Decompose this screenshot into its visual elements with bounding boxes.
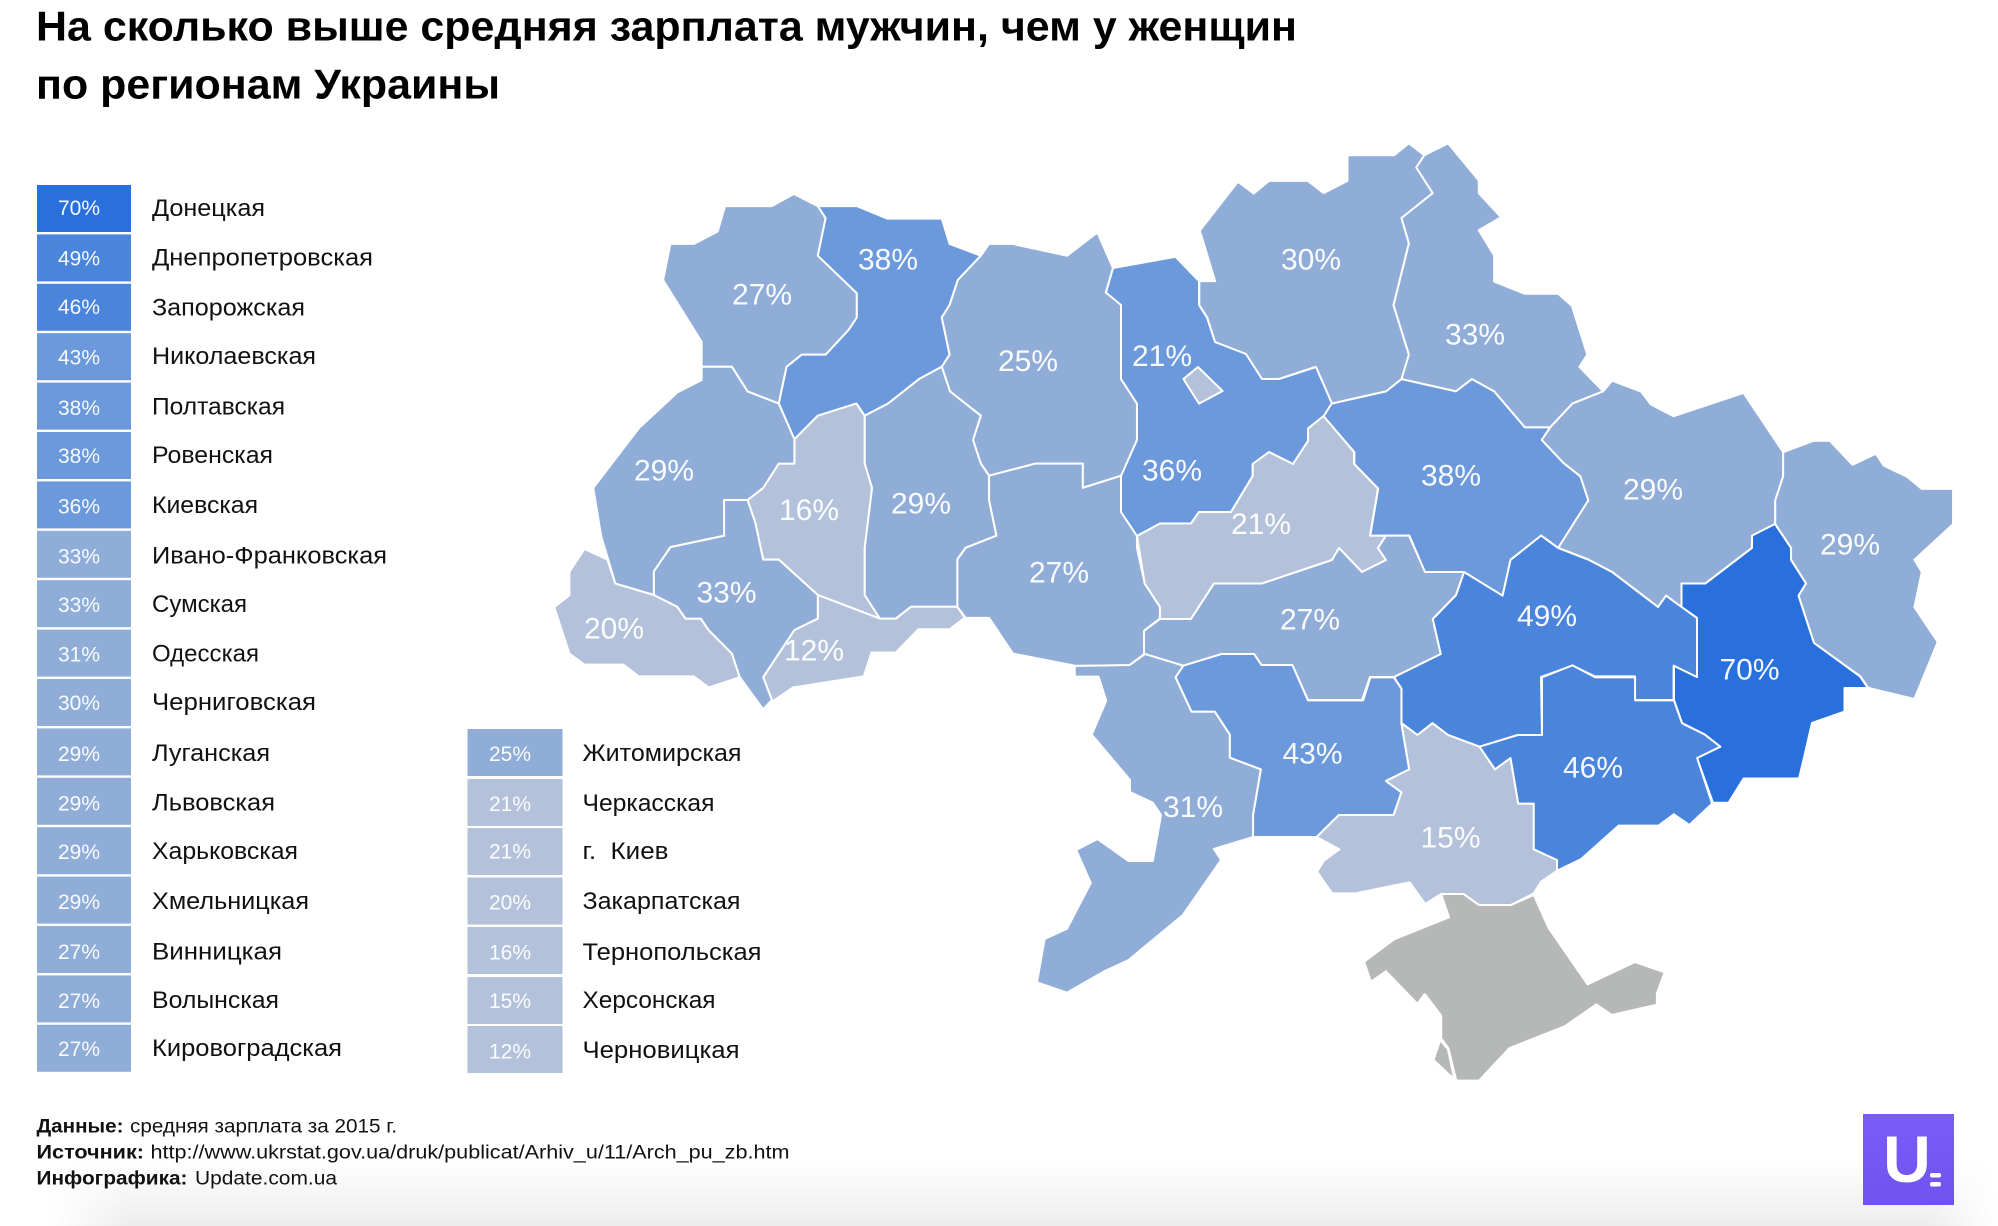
- region: Zakarpattia: [554, 549, 740, 687]
- legend: ranked regions, first column: Днепропетровская: [152, 244, 373, 272]
- region: Ivano-Frankivsk: [654, 500, 818, 709]
- map value labels: 49%: [1517, 600, 1577, 633]
- legend: ranked regions, first column: Сумская: [152, 591, 247, 618]
- legend: ranked regions, first column: [37, 185, 387, 1072]
- legend: ranked regions, first column: Запорожская: [152, 294, 305, 322]
- footer: data source credits: Источник:: [36, 1142, 144, 1164]
- region: Kharkiv: [1542, 381, 1783, 607]
- legend: ranked regions, first column: 27%: [58, 1038, 100, 1061]
- legend: ranked regions, second column: 21%: [489, 793, 531, 816]
- map value labels: 29%: [1820, 528, 1880, 562]
- legend: ranked regions, second column: 20%: [489, 892, 531, 914]
- legend: ranked regions, second column: Херсонская: [582, 987, 716, 1014]
- map value labels: 27%: [732, 278, 792, 312]
- legend: ranked regions, first column: Кировоградская: [152, 1035, 342, 1062]
- legend: ranked regions, first column: Хмельницкая: [152, 888, 309, 915]
- region: Cherkasy: [1137, 416, 1386, 619]
- legend: ranked regions, second column: Черновицкая: [582, 1037, 740, 1064]
- legend: ranked regions, second column: [468, 729, 762, 1073]
- legend: ranked regions, second column: Закарпатская: [582, 888, 740, 915]
- legend: ranked regions, first column: 27%: [58, 990, 100, 1013]
- map value labels: [584, 244, 1880, 854]
- legend: ranked regions, first column: Винницкая: [152, 938, 282, 966]
- legend: ranked regions, first column: 29%: [58, 743, 100, 766]
- region: Donetsk: [1674, 524, 1868, 803]
- region: Poltava: [1324, 379, 1588, 596]
- region: Ternopil: [748, 404, 880, 619]
- map value labels: 29%: [1623, 474, 1683, 506]
- map value labels: 29%: [634, 454, 694, 488]
- map value labels: 21%: [1132, 340, 1192, 373]
- legend: ranked regions, second column: г. Киев: [582, 838, 668, 865]
- map value labels: 36%: [1142, 454, 1202, 488]
- legend: ranked regions, first column: 70%: [58, 197, 100, 220]
- map value labels: 38%: [1421, 460, 1481, 492]
- region: Chernihiv: [1199, 143, 1433, 404]
- footer: data source credits: [36, 1116, 790, 1190]
- region: Zaporizhzhia: [1479, 665, 1720, 871]
- legend: ranked regions, first column: Харьковская: [152, 838, 298, 865]
- legend: ranked regions, second column: 25%: [489, 743, 531, 766]
- region: Sumy: [1394, 143, 1603, 427]
- region: Kirovohrad: [1144, 536, 1464, 700]
- legend: ranked regions, first column: Полтавская: [152, 394, 285, 420]
- region: Khmelnytskyi: [865, 367, 996, 619]
- region: Crimea (no data): [1364, 894, 1665, 1081]
- map value labels: 29%: [891, 488, 951, 520]
- map value labels: 70%: [1719, 654, 1780, 686]
- legend: ranked regions, second column: Черкасская: [582, 790, 714, 817]
- footer: data source credits: http://www.ukrstat.gov.ua/druk/publicat/Arhiv_u/11/Arch_pu_zb.htm: [150, 1142, 790, 1164]
- footer: data source credits: Update.com.ua: [195, 1168, 337, 1190]
- region: Vinnytsia: [957, 464, 1160, 666]
- legend: ranked regions, first column: 29%: [58, 891, 100, 914]
- legend: ranked regions, second column: 21%: [489, 840, 531, 864]
- map value labels: 30%: [1281, 244, 1341, 276]
- legend: ranked regions, first column: 43%: [58, 346, 100, 370]
- region: Odesa: [1037, 654, 1261, 993]
- legend: ranked regions, second column: Житомирская: [582, 740, 742, 767]
- map value labels: 27%: [1029, 556, 1089, 590]
- region: Chernivtsi: [763, 595, 965, 705]
- map value labels: 33%: [696, 576, 757, 610]
- region: Volyn: [663, 194, 857, 404]
- footer: data source credits: средняя зарплата за 2015 г.: [130, 1116, 397, 1138]
- region: Lviv: [593, 367, 794, 595]
- legend: ranked regions, first column: Киевская: [152, 492, 258, 519]
- title: [36, 2, 1297, 108]
- legend: ranked regions, first column: Луганская: [152, 740, 270, 767]
- legend: ranked regions, first column: 33%: [58, 594, 100, 617]
- legend: ranked regions, first column: 31%: [58, 644, 100, 666]
- legend: ranked regions, first column: Донецкая: [152, 195, 265, 222]
- legend: ranked regions, second column: Тернопольская: [582, 939, 762, 966]
- map value labels: 43%: [1282, 738, 1343, 770]
- map value labels: 16%: [779, 494, 839, 527]
- legend: ranked regions, first column: Волынская: [152, 987, 279, 1014]
- legend: ranked regions, first column: Одесская: [152, 640, 259, 668]
- legend: ranked regions, first column: 30%: [58, 692, 100, 715]
- map value labels: 27%: [1280, 604, 1340, 636]
- region: Luhansk: [1775, 441, 1953, 699]
- map value labels: 21%: [1231, 508, 1291, 541]
- map value labels: 12%: [784, 634, 844, 668]
- legend: ranked regions, second column: 16%: [489, 942, 531, 964]
- logo: Update: U: [1883, 1122, 1931, 1196]
- title: по регионам Украины: [36, 60, 500, 108]
- legend: ranked regions, first column: 27%: [58, 941, 100, 964]
- map value labels: 25%: [998, 345, 1058, 378]
- legend: ranked regions, second column: 15%: [489, 990, 531, 1013]
- choropleth map of Ukraine regions: [554, 143, 1953, 1081]
- logo: Update: [1863, 1114, 1954, 1205]
- region: Mykolaiv: [1176, 654, 1409, 837]
- title: На сколько выше средняя зарплата мужчин, чем у женщин: [36, 2, 1297, 50]
- region: Kherson: [1317, 723, 1557, 905]
- map value labels: 38%: [858, 244, 918, 276]
- legend: ranked regions, first column: Николаевская: [152, 343, 316, 370]
- legend: ranked regions, first column: 46%: [58, 296, 100, 319]
- legend: ranked regions, first column: 33%: [58, 546, 100, 568]
- legend: ranked regions, first column: 38%: [58, 397, 100, 420]
- map value labels: 46%: [1563, 752, 1623, 784]
- legend: ranked regions, first column: 49%: [58, 248, 100, 270]
- region: Rivne: [779, 206, 981, 439]
- legend: ranked regions, first column: 36%: [58, 496, 100, 518]
- map value labels: 15%: [1420, 822, 1481, 854]
- map value labels: 20%: [584, 612, 644, 646]
- legend: ranked regions, first column: Черниговская: [152, 689, 316, 716]
- legend: ranked regions, first column: Львовская: [152, 790, 275, 816]
- legend: ranked regions, second column: 12%: [489, 1040, 531, 1064]
- footer: data source credits: Инфографика:: [36, 1168, 187, 1190]
- region: Zhytomyr: [942, 232, 1137, 488]
- legend: ranked regions, first column: 29%: [58, 792, 100, 816]
- legend: ranked regions, first column: Ровенская: [152, 442, 273, 469]
- legend: ranked regions, first column: 29%: [58, 841, 100, 864]
- legend: ranked regions, first column: 38%: [58, 445, 100, 468]
- map value labels: 33%: [1445, 318, 1505, 352]
- region: Dnipropetrovsk: [1394, 536, 1697, 747]
- region: Kyiv city: [1183, 367, 1223, 404]
- footer: data source credits: Данные:: [36, 1116, 124, 1138]
- map value labels: 31%: [1163, 791, 1223, 824]
- legend: ranked regions, first column: Ивано-Франковская: [152, 542, 387, 570]
- region: Kyiv oblast: [1106, 257, 1332, 536]
